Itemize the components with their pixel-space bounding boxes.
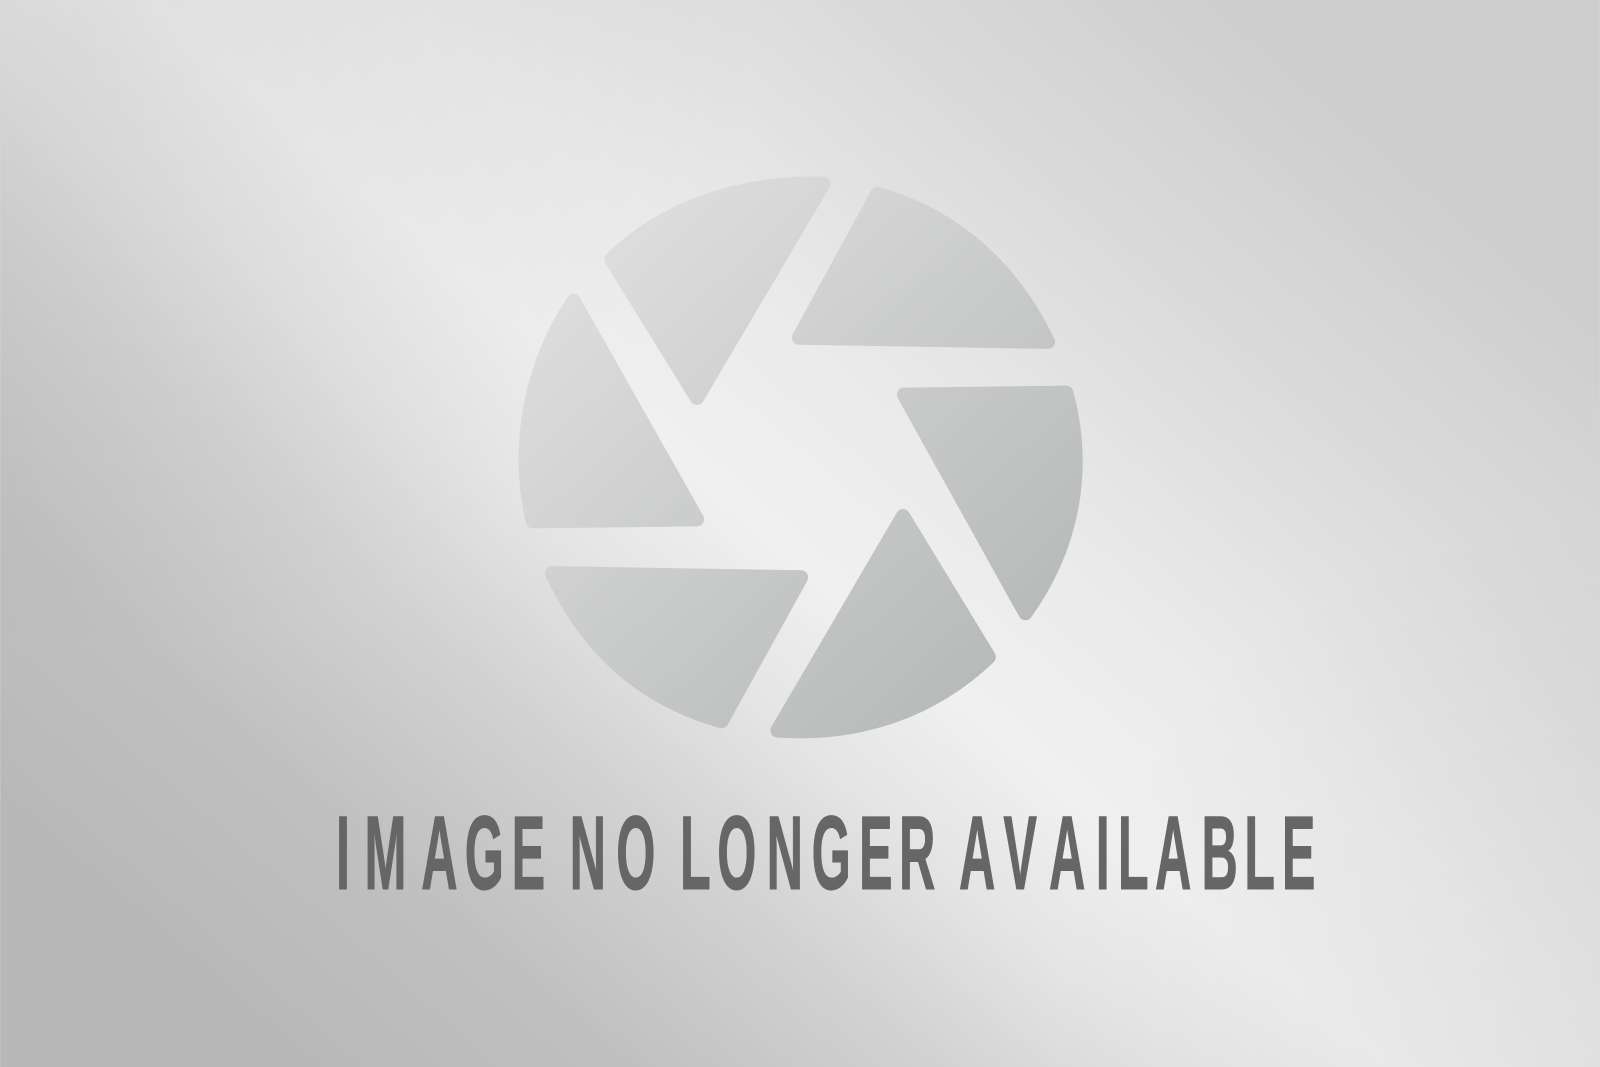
icon: camera shutter <box>526 184 1076 731</box>
shutter blade: top right <box>799 194 1048 342</box>
shutter blade: bottom left <box>552 573 801 721</box>
shutter blade: left <box>526 301 697 521</box>
shutter blade: top left <box>611 184 823 398</box>
shutter blade: bottom right <box>778 516 989 731</box>
caption text: IMAGE NO LONGER AVAILABLE <box>336 795 1315 912</box>
shutter blade: right <box>904 393 1076 613</box>
